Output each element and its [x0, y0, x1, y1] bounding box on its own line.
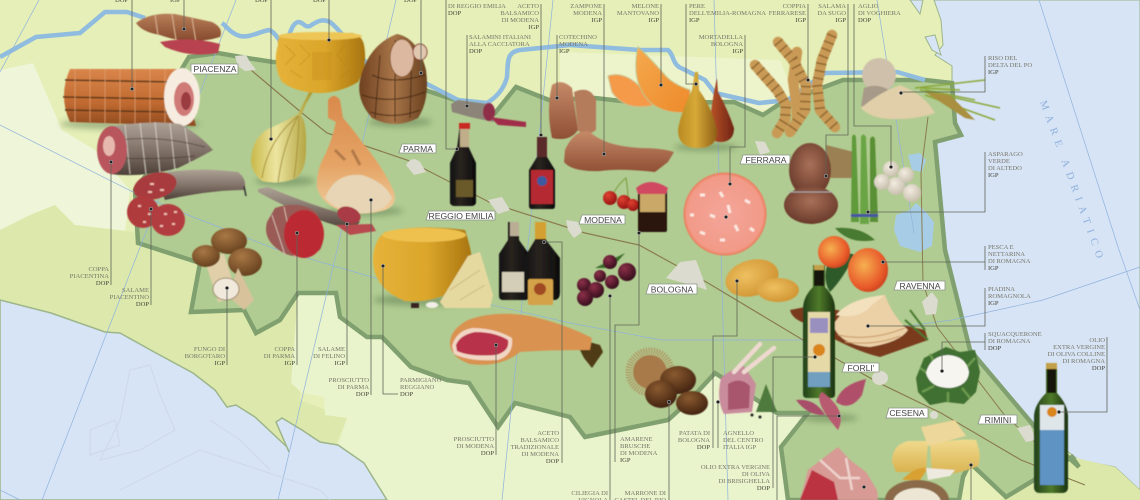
city: Rimini: RIMINI [985, 415, 1011, 425]
food: coppa piacentina [97, 122, 213, 175]
food: amarene e marmellata [603, 178, 668, 232]
city: Forlì [842, 363, 888, 385]
label: aceto balsamico tradizionale di Modena: DOP [546, 458, 559, 465]
label: salame piacentino: PIACENTINO [110, 294, 149, 301]
food: funghi porcini [192, 228, 262, 310]
label: pesca e nettarina di Romagna: DI ROMAGNA [988, 258, 1031, 265]
food: olio extra vergine colline di Romagna [1034, 363, 1068, 493]
label: coppa piacentina [70, 160, 113, 287]
leader: carne [862, 485, 866, 489]
food: aceto balsamico tradizionale di Modena [499, 222, 560, 305]
river Po [0, 12, 925, 103]
label: olio extra vergine di Brisighella: DI OLIVA [742, 471, 770, 478]
label: fungo di Borgotaro: BORGOTARO [185, 353, 225, 360]
label: salamini italiani alla cacciatora [465, 34, 531, 108]
label: aceto balsamico tradizionale di Modena: ACETO [537, 430, 559, 437]
food: formaggio di fossa e pecorino [892, 420, 980, 480]
food: carne [800, 447, 878, 500]
label: olio extra vergine di Brisighella: OLIO EXTRA VERGINE [701, 464, 770, 471]
label: olio extra vergine colline di Romagna: DOP [1092, 365, 1105, 372]
label: aceto balsamico di Modena: IGP [528, 24, 539, 31]
city: Reggio Emilia: REGGIO EMILIA [429, 211, 494, 221]
label: patata di Bologna [678, 279, 739, 451]
label: zampone Modena: ZAMPONE [570, 3, 602, 10]
label: marrone di Castel del Rio [614, 400, 671, 500]
leader: grana padano [327, 0, 331, 42]
food: coppia ferrarese [755, 35, 835, 133]
label: salame di Felino: DI FELINO [313, 353, 345, 360]
label: pere dell'Emilia-Romagna: IGP [689, 17, 700, 24]
label: pesca e nettarina di Romagna [881, 244, 1031, 272]
label: olio extra vergine di Brisighella: DOP [757, 485, 770, 492]
label: fungo di Borgotaro: FUNGO DI [194, 346, 225, 353]
label: coppa piacentina: PIACENTINA [70, 273, 109, 280]
food: squacquerone di Romagna [916, 347, 980, 405]
label: aceto balsamico tradizionale di Modena [511, 240, 562, 465]
label: aceto balsamico di Modena: DI MODENA [502, 17, 539, 24]
food: pancetta roll [60, 68, 200, 130]
food: coppa di Parma [266, 205, 324, 258]
label: cotechino Modena [555, 34, 597, 100]
city: Forlì: FORLI' [848, 363, 875, 373]
label: prosciutto di Modena [454, 343, 498, 457]
label: olio extra vergine colline di Romagna: EXTRA VERGINE [1053, 344, 1105, 351]
label: aceto balsamico tradizionale di Modena: BALSAMICO [520, 437, 559, 444]
food: prosciutto di Parma [317, 96, 403, 216]
Emilia-Romagna region [135, 53, 1079, 500]
label: melone mantovano: IGP [648, 17, 659, 24]
sea: Tyrrhenian [0, 300, 387, 500]
label: pere dell'Emilia-Romagna: PERE [689, 3, 705, 10]
label: coppa di Parma: DI PARMA [264, 353, 295, 360]
label: cotechino Modena: MODENA [559, 41, 588, 48]
food: culatello [359, 34, 432, 127]
food: riso del delta del Po [861, 80, 1000, 120]
label: squacquerone di Romagna: SQUACQUERONE [988, 331, 1042, 338]
label: coppia ferrarese: IGP [795, 17, 806, 24]
label: patata di Bologna: PATATA DI [679, 430, 710, 437]
food: melone mantovano [608, 47, 690, 113]
faint map outlines over the Tyrrhenian [90, 365, 330, 500]
pale land band under the river [560, 52, 800, 110]
label: coppa di Parma [264, 231, 299, 367]
food: pesca e nettarina di Romagna [818, 228, 888, 292]
food: aglio di Voghiera [874, 161, 921, 202]
yellow-green land west of region [0, 205, 347, 450]
label: pesca e nettarina di Romagna: NETTARINA [988, 251, 1025, 258]
label: asparago verde di Altedo: ASPARAGO [988, 151, 1023, 158]
food: marrone di Castel del Rio [629, 351, 708, 415]
leader: mortadella centre dot [724, 215, 728, 219]
label: riso del delta del Po [899, 55, 1032, 95]
label: parmigiano reggiano: DOP [400, 391, 413, 398]
food: salame di Felino [258, 187, 376, 235]
label: mortadella Bologna: IGP [732, 48, 743, 55]
label: agnello del centro Italia: AGNELLO [723, 430, 754, 437]
food: salama da sugo [784, 143, 854, 224]
food: aceto balsamico di Modena [529, 137, 555, 209]
label: amarene brusche di Modena [615, 231, 658, 464]
city: Cesena [886, 408, 938, 419]
label: amarene brusche di Modena: AMARENE [620, 436, 652, 443]
label: coppa piacentina: COPPA [88, 266, 109, 273]
label: cotechino Modena: COTECHINO [559, 34, 597, 41]
label: aceto balsamico di Modena: ACETO [517, 3, 539, 10]
city: Reggio Emilia [426, 197, 510, 221]
label: salame piacentino [110, 207, 153, 308]
river Reno and coast road [921, 117, 1050, 455]
label: piadina romagnola: PIADINA [988, 286, 1015, 293]
label: squacquerone di Romagna: DOP [988, 345, 1001, 352]
food: piadina romagnola on board [790, 295, 928, 357]
label: olio extra vergine colline di Romagna [1048, 337, 1107, 414]
label: salama da sugo: SALAMA [818, 3, 846, 10]
leader: provolone [269, 0, 273, 141]
food: olio extra vergine di Brisighella [803, 265, 835, 398]
food: pere [674, 72, 738, 151]
label: asparago verde di Altedo: VERDE [988, 158, 1010, 165]
label: zampone Modena: IGP [591, 17, 602, 24]
label: prosciutto di Parma: DI PARMA [338, 384, 369, 391]
city: Modena [566, 215, 625, 238]
city: Ravenna [894, 281, 945, 315]
label: piadina romagnola: IGP [988, 300, 999, 307]
city: Ferrara [740, 141, 790, 165]
food: mortadella [684, 172, 766, 256]
label: pesca e nettarina di Romagna: IGP [988, 265, 999, 272]
food: aceto balsamico di Reggio Emilia [450, 123, 476, 206]
label: mortadella Bologna: MORTADELLA [699, 34, 743, 41]
label: top cut-off DOP marks [115, 0, 417, 4]
city: Ferrara: FERRARA [745, 155, 787, 165]
label: zampone Modena: MODENA [573, 10, 602, 17]
label: aglio di Voghiera: AGLIO [858, 3, 879, 10]
label: melone mantovano [617, 3, 663, 87]
label: ciliegia di Vignola [571, 294, 612, 500]
city: Modena: MODENA [584, 215, 622, 225]
label: coppa di Parma: IGP [284, 360, 295, 367]
food: salame top [136, 14, 221, 55]
label: pere dell'Emilia-Romagna [686, 3, 766, 86]
label: pere dell'Emilia-Romagna: DELL'EMILIA-ROMAGNA [689, 10, 766, 17]
label: melone mantovano: MELONE [632, 3, 659, 10]
city: Cesena: CESENA [889, 408, 925, 418]
leader: pancetta piacentina [130, 0, 134, 91]
label: salame di Felino [313, 222, 349, 367]
label: aceto balsamico di Modena [500, 3, 543, 137]
label: prosciutto di Parma [329, 198, 373, 398]
label: prosciutto di Modena: PROSCIUTTO [454, 436, 494, 443]
label: aceto balsamico tradizionale di Modena: TRADIZIONALE [511, 444, 559, 451]
food: amarene brusche di Modena [577, 253, 636, 306]
label: agnello del centro Italia [716, 400, 764, 451]
pale land: Tuscany [291, 293, 808, 500]
label: asparago verde di Altedo: IGP [988, 172, 999, 179]
label: salama da sugo: DA SUGO [817, 10, 846, 17]
label: coppia ferrarese [769, 3, 810, 82]
food: agnello del centro Italia [719, 344, 777, 418]
label: ciliegia di Vignola: CILIEGIA DI [571, 490, 608, 497]
label: marrone di Castel del Rio: MARRONE DI [625, 490, 666, 497]
label: coppa di Parma: COPPA [274, 346, 295, 353]
label: aglio di Voghiera [854, 3, 901, 169]
food: prosciutto di Modena [450, 314, 603, 368]
food: scalogno di Romagna [796, 379, 866, 430]
label: pesca e nettarina di Romagna: PESCA E [988, 244, 1014, 251]
label: prosciutto di Parma: PROSCIUTTO [329, 377, 369, 384]
label: amarene brusche di Modena: DI MODENA [620, 450, 658, 457]
label: amarene brusche di Modena: BRUSCHE [620, 443, 650, 450]
city: Ravenna: RAVENNA [900, 281, 941, 291]
city: Piacenza: PIACENZA [194, 64, 237, 74]
food: salame piacentino [127, 168, 246, 236]
label: salamini italiani alla cacciatora: DOP [469, 48, 482, 55]
label: parmigiano reggiano: PARMIGIANO [400, 377, 442, 384]
label: olio extra vergine di Brisighella: DI BRISIGHELLA [718, 478, 770, 485]
leader: culatello di Zibello [419, 0, 423, 75]
label: coppa piacentina: DOP [96, 280, 109, 287]
label: coppia ferrarese: FERRARESE [769, 10, 806, 17]
label: salama da sugo: IGP [835, 17, 846, 24]
label: olio extra vergine colline di Romagna: DI ROMAGNA [1063, 358, 1105, 365]
label: olio extra vergine di Brisighella [701, 355, 817, 492]
label: piadina romagnola [866, 286, 1031, 328]
food: sacchetto di riso [861, 58, 896, 107]
label: riso del delta del Po: IGP [988, 69, 999, 76]
label: parmigiano reggiano [381, 264, 442, 398]
label: riso del delta del Po: RISO DEL [988, 55, 1017, 62]
label: aceto balsamico tradizionale di Reggio Emilia: DOP [448, 10, 461, 17]
label: aceto balsamico tradizionale di Modena: DI MODENA [522, 451, 559, 458]
label: salamini italiani alla cacciatora: SALAMINI ITALIANI [469, 34, 531, 41]
city: Rimini [978, 415, 1036, 442]
label: aceto balsamico di Modena: BALSAMICO [500, 10, 539, 17]
city: Parma: PARMA [403, 144, 433, 154]
label: salamini italiani alla cacciatora: ALLA CACCIATORA [469, 41, 530, 48]
label: agnello del centro Italia: ITALIA IGP [723, 444, 757, 451]
food: cotechino foot [564, 131, 674, 172]
food: zampone [549, 82, 596, 139]
label: fungo di Borgotaro: IGP [214, 360, 225, 367]
label: salame di Felino: SALAME [318, 346, 345, 353]
label: amarene brusche di Modena: IGP [620, 457, 631, 464]
label: salame di Felino: IGP [334, 360, 345, 367]
city: Parma [399, 144, 436, 175]
label: aglio di Voghiera: DOP [858, 17, 871, 24]
label: salama da sugo [817, 3, 848, 178]
label: mortadella Bologna [699, 34, 745, 186]
city: Bologna [646, 260, 707, 294]
food: salamini alla cacciatora [451, 100, 526, 127]
label: asparago verde di Altedo [866, 151, 1023, 214]
label: prosciutto di Modena: DI MODENA [457, 443, 494, 450]
label: squacquerone di Romagna [940, 331, 1042, 373]
label: prosciutto di Modena: DOP [481, 450, 494, 457]
label: aceto balsamico tradizionale di Reggio Emilia: DI REGGIO EMILIA [448, 3, 506, 10]
label: aceto balsamico tradizionale di Reggio Emilia [446, 0, 506, 151]
label: cotechino Modena: IGP [559, 48, 570, 55]
label: patata di Bologna: DOP [697, 444, 710, 451]
leader: salame top [182, 0, 186, 31]
food: patata di Bologna [721, 254, 799, 302]
label: olio extra vergine colline di Romagna: OLIO [1089, 337, 1105, 344]
land south-east of the region [1000, 457, 1140, 500]
label: fungo di Borgotaro [185, 286, 229, 367]
label: piadina romagnola: ROMAGNOLA [988, 293, 1031, 300]
label: salame piacentino: SALAME [122, 287, 149, 294]
food: grana padano wheel [276, 32, 365, 93]
Via Emilia road [251, 70, 1085, 485]
lagoons on the northern coast [910, 0, 941, 55]
label: asparago verde di Altedo: DI ALTEDO [988, 165, 1022, 172]
food: formaggio tondo [885, 480, 949, 500]
city: Piacenza [191, 55, 256, 74]
food: parmigiano reggiano [373, 227, 493, 308]
leader: formaggio di fossa [969, 463, 973, 500]
label: coppia ferrarese: COPPIA [783, 3, 806, 10]
lagoons: valli di Comacchio [894, 153, 934, 252]
label: agnello del centro Italia: DEL CENTRO [723, 437, 764, 444]
sea name: Mare Adriatico: MARE ADRIATICO [1037, 99, 1107, 266]
food: asparago verde di Altedo [851, 134, 878, 224]
label: prosciutto di Parma: DOP [356, 391, 369, 398]
label: riso del delta del Po: DELTA DEL PO [988, 62, 1032, 69]
pale land: Liguria side [0, 63, 165, 255]
label: squacquerone di Romagna: DI ROMAGNA [988, 338, 1031, 345]
label: mortadella Bologna: BOLOGNA [711, 41, 743, 48]
label: parmigiano reggiano: REGGIANO [400, 384, 435, 391]
leader: scalogno di Romagna [777, 414, 841, 500]
label: salame piacentino: DOP [136, 301, 149, 308]
city: Bologna: BOLOGNA [651, 284, 694, 294]
label: olio extra vergine colline di Romagna: DI OLIVA COLLINE [1048, 351, 1105, 358]
label: melone mantovano: MANTOVANO [617, 10, 659, 17]
sea: Adriatic [934, 0, 1140, 490]
food: provolone [251, 88, 315, 186]
label: aglio di Voghiera: DI VOGHIERA [858, 10, 901, 17]
label: zampone Modena [570, 3, 606, 156]
label: patata di Bologna: BOLOGNA [678, 437, 710, 444]
